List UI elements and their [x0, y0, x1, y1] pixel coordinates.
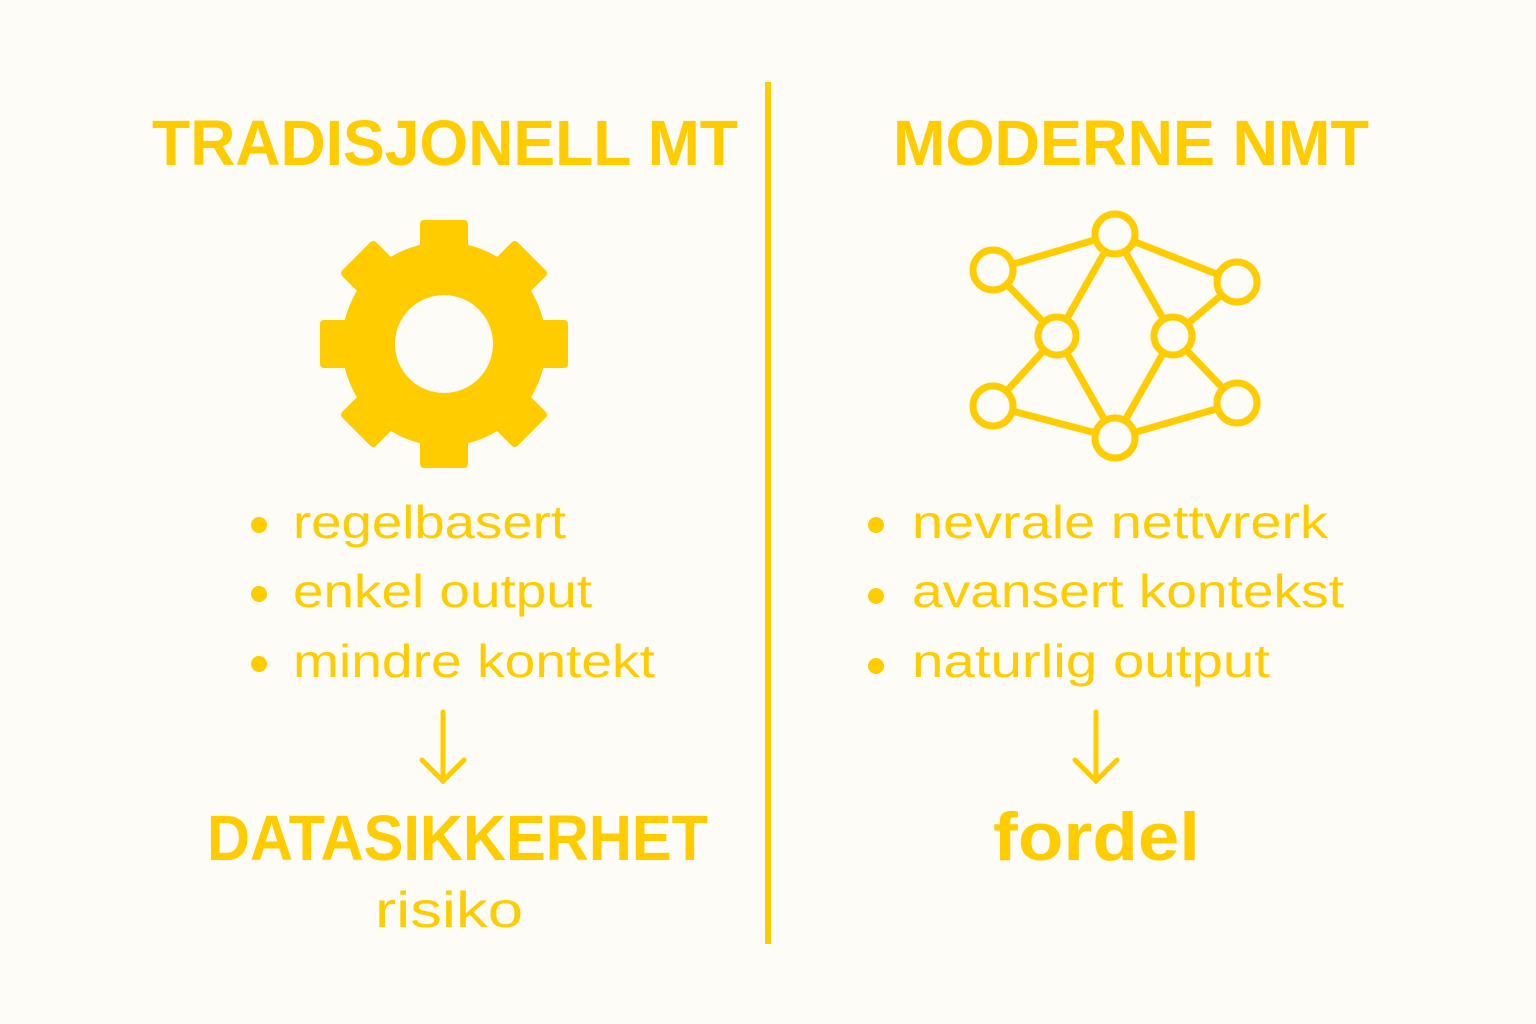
result: datasikkerhet risiko: risiko: [375, 882, 523, 938]
result: fordel: fordel: [993, 799, 1200, 875]
list: modern features: naturlig output: [912, 635, 1270, 687]
title: moderne NMT: MODERNE NMT: [893, 107, 1369, 179]
arrow: right: [1075, 712, 1117, 781]
list: traditional features: [251, 496, 655, 687]
title: tradisjonell MT: TRADISJONELL MT: [152, 107, 738, 179]
divider: [765, 82, 771, 944]
list: traditional features: enkel output: [293, 565, 592, 617]
list: modern features: nevrale nettvrerk: [912, 496, 1329, 548]
arrow: left: [422, 712, 464, 781]
result: datasikkerhet risiko: DATASIKKERHET: [207, 802, 708, 874]
list: modern features: [868, 496, 1344, 687]
list: traditional features: regelbasert: [293, 496, 566, 548]
list: modern features: avansert kontekst: [912, 565, 1344, 617]
icon: gear: [320, 220, 568, 468]
icon: neural network: [973, 214, 1257, 458]
result: datasikkerhet risiko: [207, 802, 708, 938]
list: traditional features: mindre kontekt: [293, 635, 655, 687]
